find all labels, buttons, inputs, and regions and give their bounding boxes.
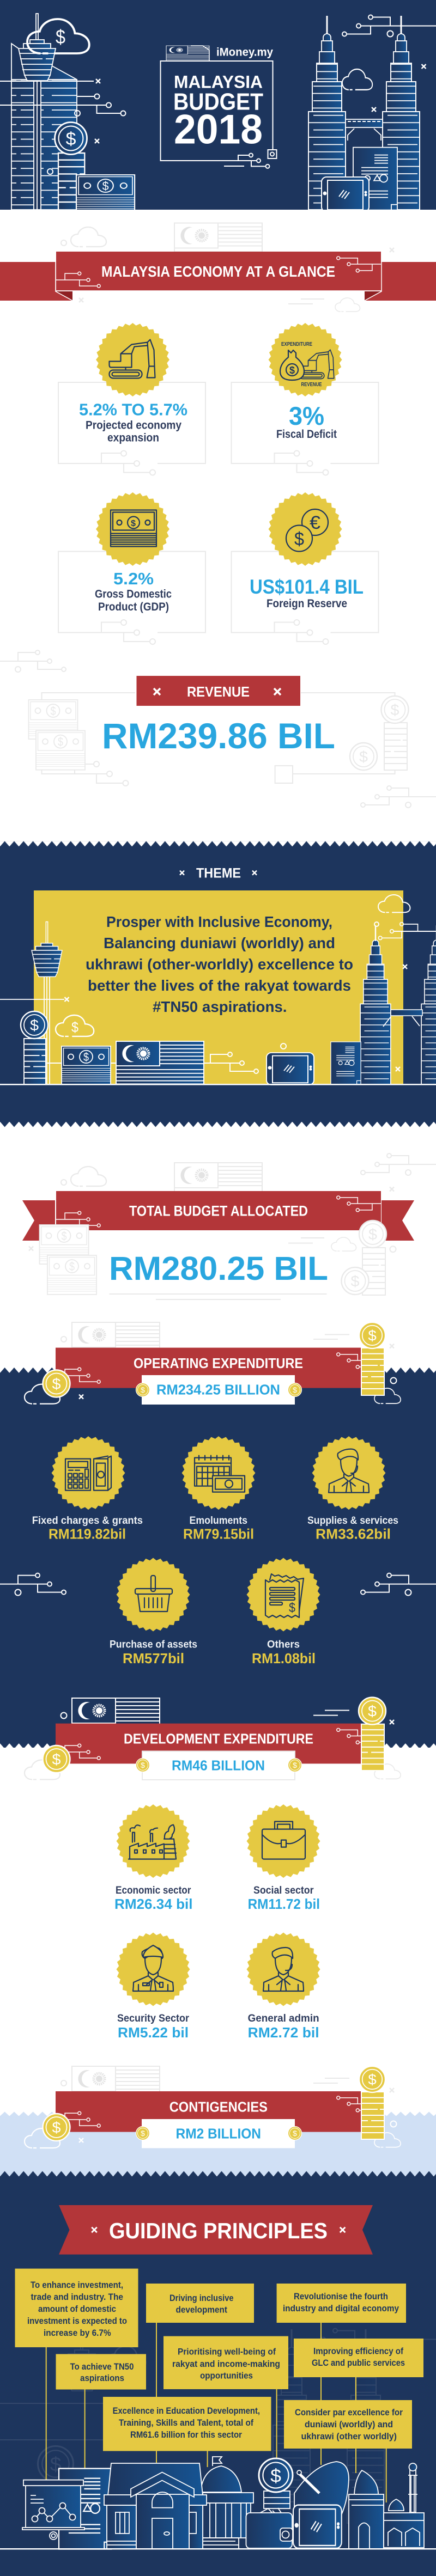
title frame [160, 61, 277, 168]
box: GLC efficiency: Improving efficiency of [313, 2346, 403, 2356]
ribbon [56, 2091, 361, 2132]
box: education excellence [103, 2397, 271, 2451]
theme statement: Balancing duniawi (worldly) and [104, 935, 335, 951]
theme statement: Prosper with Inclusive Economy, [106, 913, 332, 930]
icon: yellow coin and stack [43, 1698, 386, 1773]
caption: Gross Domestic [95, 588, 172, 600]
panel: contingencies [0, 2066, 436, 2176]
badge with person icon [246, 1932, 320, 2006]
label: Others [267, 1639, 300, 1651]
label: Social sector [253, 1885, 314, 1896]
panel: theme [0, 841, 436, 1127]
flag on navy [61, 1698, 394, 1742]
icon: cloud with dollar [27, 19, 89, 53]
panel: projected economy expansion [58, 323, 205, 475]
icon: presentation board [22, 2480, 84, 2540]
value: RM577bil [123, 1650, 184, 1667]
amount box [136, 1375, 302, 1405]
box: fourth industry: industry and digital economy [283, 2304, 399, 2313]
ribbon [56, 1348, 361, 1388]
item: social sector [246, 1804, 320, 1912]
circuits [65, 2096, 372, 2127]
circuits beside row two [0, 1573, 436, 1596]
box: GLC efficiency [294, 2339, 423, 2377]
icon: coin stack [55, 122, 87, 210]
panel: foreign reserve [231, 492, 378, 644]
theme statement: better the lives of the rakyat towards [88, 977, 351, 994]
value: RM79.15bil [183, 1526, 254, 1542]
section title: DEVELOPMENT EXPENDITURE [124, 1731, 313, 1747]
theme illustration left [0, 922, 258, 1084]
theme heading: THEME [196, 865, 241, 881]
ground line [0, 1084, 436, 1085]
label: Fixed charges & grants [32, 1515, 143, 1527]
theme illustration right [267, 895, 436, 1085]
box: enhance investment: increase by 6.7% [44, 2328, 111, 2338]
box: well-being of rakyat: rakyat and income-making [172, 2359, 280, 2369]
badge with excavator icon [96, 323, 169, 396]
icon: coin stack [21, 1011, 48, 1084]
badge with receipt icon: $ [289, 1601, 295, 1615]
circuit lines right [342, 15, 436, 112]
statistic: 3% [289, 401, 324, 430]
ribbon [59, 2205, 373, 2255]
icon: banknote [62, 1046, 111, 1084]
caption [95, 588, 172, 613]
item: economic sector [114, 1804, 193, 1912]
underline strokes [109, 1294, 327, 1299]
icon: yellow coin and stack [43, 2066, 385, 2141]
box: TN50 aspirations [56, 2354, 146, 2390]
box: enhance investment: amount of domestic [38, 2304, 116, 2314]
value: RM33.62bil [316, 1526, 391, 1542]
statistic: 5.2% [113, 569, 154, 588]
section title: CONTIGENCIES [169, 2099, 268, 2115]
value: RM5.22 bil [118, 2024, 189, 2041]
label: Economic sector [116, 1885, 191, 1896]
item: others [246, 1558, 320, 1667]
value: RM119.82bil [49, 1526, 126, 1542]
box: fourth industry: Revolutionise the fourth [294, 2292, 388, 2302]
item: supplies and services [307, 1436, 398, 1542]
icon: satellite dish [294, 2462, 349, 2522]
icon: document [353, 148, 397, 210]
box: education excellence: Excellence in Education Development, [113, 2406, 260, 2416]
badge with coins icon: € [310, 512, 320, 533]
box: enhance investment: To enhance investment, [31, 2280, 123, 2290]
box: education excellence: RM61.6 billion for this sector [130, 2430, 243, 2440]
box: enhance investment: trade and industry. The [31, 2292, 123, 2302]
value: RM26.34 bil [114, 1896, 193, 1912]
pale flag [61, 1322, 394, 1366]
icon: house and school [104, 2463, 207, 2549]
badge with money bag and excavator icon: EXPENDITURE [281, 341, 312, 347]
badge with factory icon [117, 1804, 190, 1878]
badge with basket icon [117, 1558, 190, 1632]
theme statement: ukhrawi (other-worldly) excellence to [86, 956, 353, 973]
logo block [160, 46, 277, 168]
label: Security Sector [117, 2013, 190, 2024]
badge with banknote icon: $ [131, 519, 136, 528]
box: TN50 aspirations: To achieve TN50 [70, 2362, 134, 2372]
total amount: RM280.25 BIL [109, 1250, 328, 1287]
box: par excellence: Consider par excellence for [295, 2408, 403, 2418]
ribbon [56, 1724, 361, 1763]
icon: tablet [267, 1043, 314, 1085]
item: fixed charges and grants [32, 1436, 143, 1542]
badge with calculator icon [51, 1436, 125, 1510]
navy background [0, 1368, 436, 1373]
amount box: RM234.25 BILLION [156, 1382, 280, 1398]
icon: KL tower [0, 922, 69, 1084]
marks [396, 965, 407, 1071]
pale blue background [0, 2112, 436, 2116]
caption: Projected economy [86, 419, 181, 431]
connector lines [46, 2323, 386, 2502]
icon: tablet [322, 177, 369, 212]
box: par excellence [284, 2400, 412, 2449]
value: RM11.72 bil [248, 1896, 320, 1912]
pale flag [61, 2066, 394, 2110]
revenue banner: REVENUE [187, 683, 250, 700]
icon: cloud beside towers [342, 69, 372, 90]
statistic: 5.2% TO 5.7% [79, 400, 187, 419]
ribbon: GUIDING PRINCIPLES [109, 2218, 328, 2243]
box: well-being of rakyat: Prioritising well-being of [178, 2347, 276, 2357]
box: well-being of rakyat: opportunities [200, 2371, 253, 2381]
theme statement: #TN50 aspirations. [153, 998, 287, 1015]
label: General admin [248, 2013, 319, 2024]
revenue amount: RM239.86 BIL [102, 716, 335, 756]
item: security sector [117, 1932, 190, 2041]
value: RM1.08bil [252, 1650, 316, 1667]
title [174, 75, 263, 144]
box: enhance investment [15, 2269, 138, 2347]
icon: small flag [166, 46, 209, 60]
item: emoluments [182, 1436, 255, 1542]
amount box [136, 2119, 302, 2148]
icon: cloud [378, 895, 410, 912]
clouds and marks [25, 1378, 401, 1404]
title: BUDGET [173, 89, 263, 115]
panel: GDP [58, 492, 205, 644]
navy background [0, 2171, 436, 2576]
icon: KL tower and office block [11, 14, 77, 210]
badge with briefcase icon [246, 1804, 320, 1878]
icon: cloud [56, 1015, 94, 1036]
box: TN50 aspirations: aspirations [80, 2373, 124, 2383]
hero panel [0, 0, 436, 214]
icon: domed government building [201, 2457, 253, 2549]
icon: Petronas towers [308, 16, 420, 210]
icon: flag [116, 1041, 204, 1084]
icon: tablet [293, 2505, 342, 2548]
value: RM2.72 bil [248, 2024, 319, 2041]
icon: banknote [76, 175, 135, 214]
box: fourth industry [277, 2284, 406, 2323]
item: purchase of assets [110, 1558, 197, 1667]
ribbon title: MALAYSIA ECONOMY AT A GLANCE [101, 263, 335, 280]
ribbon: total budget allocated [22, 1191, 414, 1241]
badge with money bag and excavator icon: REVENUE [301, 381, 322, 388]
caption [86, 419, 181, 444]
badge with money bag and excavator icon [268, 323, 342, 396]
pale money graphics around revenue [28, 693, 409, 786]
box: driving inclusive development: development [175, 2305, 227, 2315]
box: GLC efficiency: GLC and public services [312, 2358, 405, 2368]
caption: Product (GDP) [98, 601, 169, 613]
panel: operating expenditure [0, 1322, 436, 1744]
icon: cloud with dollar: $ [56, 26, 65, 48]
badge with officer icon [117, 1932, 190, 2006]
panel: guiding principles [0, 2171, 436, 2576]
icon: coin stack [259, 2458, 293, 2508]
box: enhance investment: investment is expected to [27, 2316, 127, 2326]
circuit [374, 922, 436, 941]
panel: development expenditure [0, 1698, 436, 2041]
theme statement [86, 913, 353, 1015]
clouds and marks [25, 2121, 401, 2148]
circuit in ribbon [56, 257, 381, 288]
pale decoration above economy ribbon [61, 223, 394, 312]
badge with receipt icon [246, 1558, 320, 1632]
ribbon title: TOTAL BUDGET ALLOCATED [129, 1202, 308, 1219]
badge with coins icon: $ [294, 529, 304, 550]
box: driving inclusive development: Driving inclusive [169, 2293, 234, 2303]
ground line [0, 2548, 436, 2550]
brand name: iMoney.my [216, 46, 273, 59]
title: 2018 [174, 107, 263, 152]
box: education excellence: Training, Skills and Talent, total of [119, 2418, 253, 2428]
panel: fiscal deficit [231, 323, 378, 475]
yellow theme box [34, 890, 403, 1084]
pale circuits around revenue [0, 650, 436, 808]
label: Emoluments [190, 1515, 247, 1527]
caption: expansion [107, 431, 159, 444]
circuits [65, 1353, 372, 1383]
icon: document [331, 1042, 361, 1084]
title: MALAYSIA [174, 72, 263, 91]
circuit in ribbon [56, 1196, 381, 1227]
badge with calendar icon [182, 1436, 255, 1510]
pale money graphics around total budget [39, 1220, 386, 1295]
caption: Foreign Reserve [267, 597, 347, 610]
icon: Petronas towers [360, 925, 436, 1084]
amount box: RM46 BILLION [172, 1757, 265, 1774]
badge with person icon [312, 1436, 386, 1510]
section title: OPERATING EXPENDITURE [134, 1355, 303, 1371]
circuits [65, 1728, 372, 1760]
ghost illustration [0, 2324, 436, 2523]
item: general admin [246, 1932, 320, 2041]
pale clouds [25, 1760, 401, 1780]
theme heading [180, 865, 257, 881]
icon: yellow coin and stack [43, 1322, 385, 1397]
icon: cloud: $ [71, 1019, 78, 1035]
box: well-being of rakyat [164, 2336, 288, 2389]
box: driving inclusive development [146, 2284, 254, 2323]
circuit [46, 1052, 258, 1073]
badge with banknote icon [96, 492, 169, 566]
icon: mosque [349, 2463, 424, 2549]
pale decoration above total budget [29, 1153, 436, 1252]
city illustration [22, 2457, 424, 2549]
label: Purchase of assets [110, 1639, 197, 1651]
statistic: US$101.4 BIL [250, 576, 364, 598]
zigzag edge [0, 1743, 436, 1748]
amount box: RM2 BILLION [175, 2125, 261, 2141]
ribbon: Malaysia economy at a glance [0, 252, 436, 301]
revenue banner [136, 676, 300, 706]
badge with coins icon [268, 492, 342, 566]
box: par excellence: duniawi (worldly) and [305, 2420, 393, 2430]
label: Supplies & services [307, 1515, 398, 1527]
circuit lines left [0, 79, 125, 174]
box: par excellence: ukhrawi (other worldly) [301, 2432, 397, 2441]
caption: Fiscal Deficit [276, 428, 337, 441]
icon: wallet [246, 2508, 293, 2548]
amount box [136, 1751, 302, 1780]
icon: document [59, 2469, 111, 2549]
badge with money bag and excavator icon: $ [289, 365, 295, 376]
